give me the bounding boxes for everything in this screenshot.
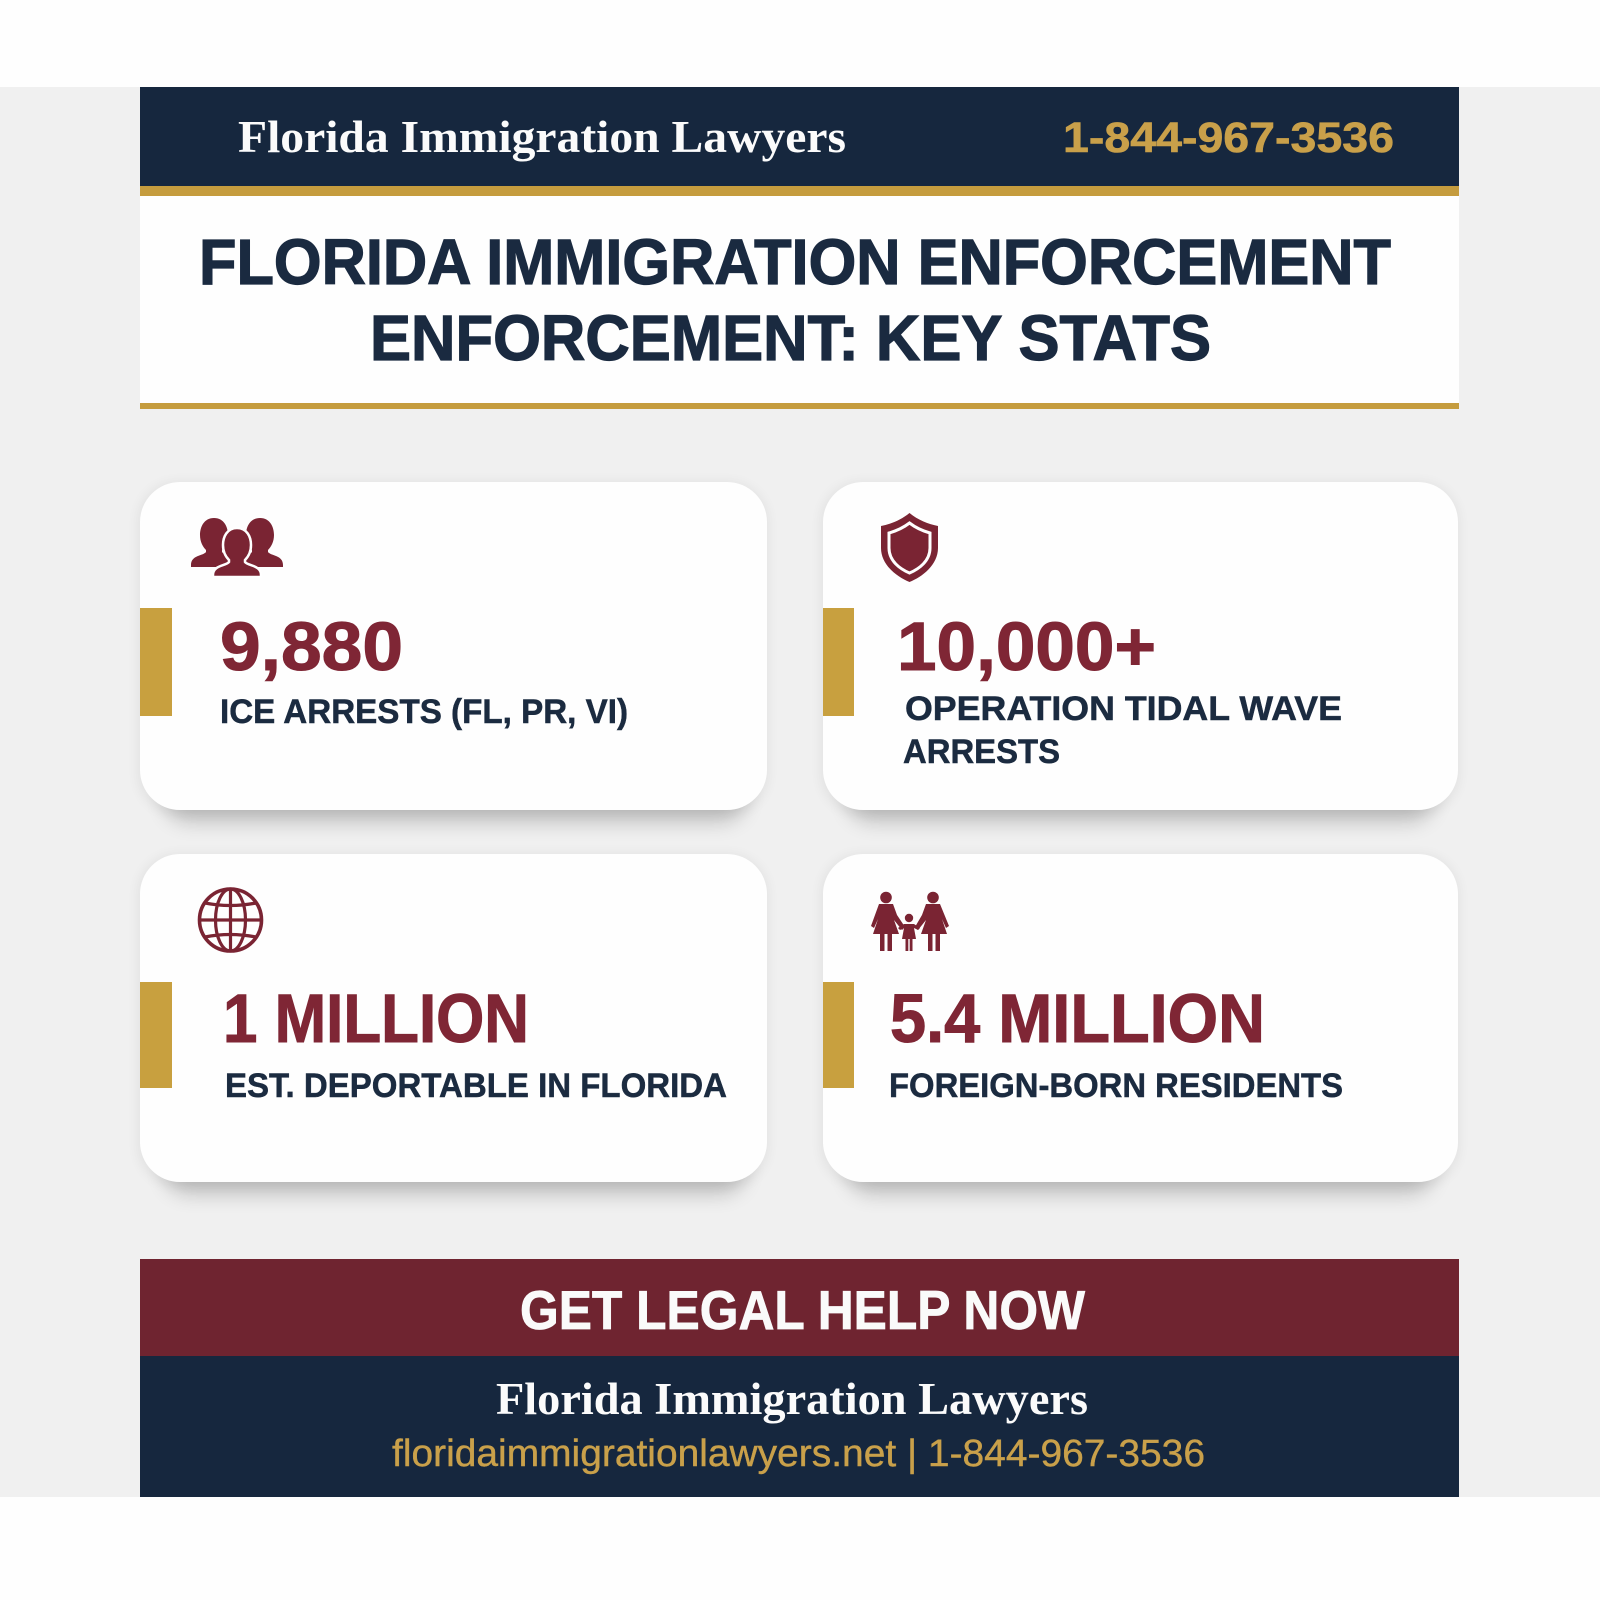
header firm name: Florida Immigration Lawyers [238, 111, 846, 162]
stat label [903, 690, 1342, 771]
icon: family [871, 892, 949, 951]
title: ENFORCEMENT: KEY STATS [370, 302, 1211, 374]
stat label: FOREIGN-BORN RESIDENTS [889, 1067, 1343, 1105]
call to action text: GET LEGAL HELP NOW [520, 1279, 1085, 1341]
footer firm name: Florida Immigration Lawyers [496, 1374, 1088, 1424]
panel: Operation Tidal Wave [821, 482, 1459, 822]
call to action banner [140, 1259, 1459, 1356]
icon: shield [881, 513, 938, 582]
stat label: ICE ARRESTS (FL, PR, VI) [220, 693, 628, 731]
header bar [140, 87, 1459, 186]
stat value: 10,000+ [897, 608, 1156, 685]
footer website and phone: floridaimmigrationlawyers.net | 1-844-967-3536 [392, 1433, 1205, 1475]
panel: foreign-born residents [821, 854, 1459, 1194]
icon: globe [199, 889, 262, 951]
stat value: 9,880 [220, 608, 403, 685]
stat label: OPERATION TIDAL WAVE [905, 690, 1342, 728]
stat label: EST. DEPORTABLE IN FLORIDA [225, 1067, 727, 1105]
stat value: 1 MILLION [223, 980, 529, 1057]
footer [140, 1356, 1459, 1497]
header phone number: 1-844-967-3536 [1063, 114, 1394, 162]
icon: people group [191, 518, 283, 577]
title: FLORIDA IMMIGRATION ENFORCEMENT [199, 226, 1391, 298]
title [199, 226, 1391, 374]
stat value: 5.4 MILLION [890, 980, 1265, 1057]
panel: ICE arrests [138, 482, 768, 822]
panel: estimated deportable [138, 854, 768, 1194]
title panel [140, 186, 1459, 409]
stat label: ARRESTS [903, 733, 1060, 771]
